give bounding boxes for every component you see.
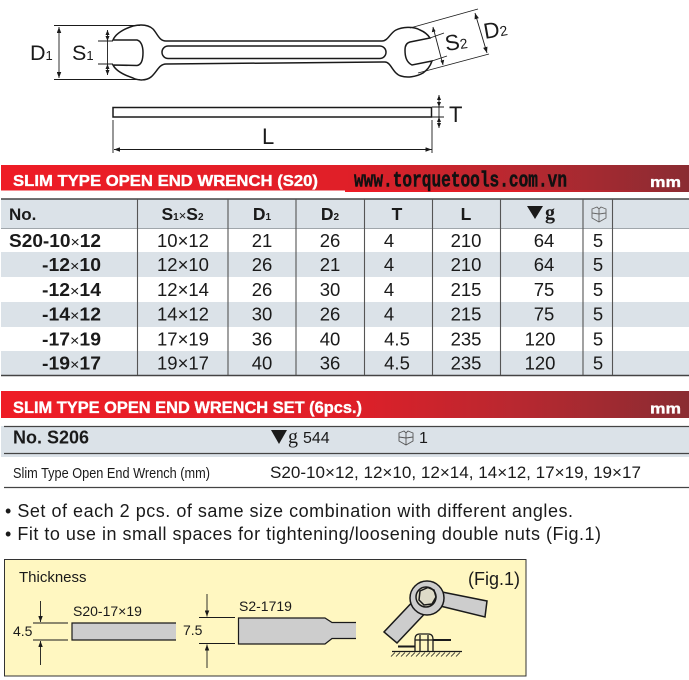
table row backgrounds — [1, 199, 689, 375]
dimension D2: D2 — [482, 15, 509, 44]
diagram: wrench side view with dimensions: L — [262, 124, 274, 149]
figure 1: wrench on double nuts — [384, 569, 520, 656]
table rows: S20-10×12 — [9, 231, 101, 251]
table rows: 5 — [593, 328, 603, 350]
table rows: 210 — [451, 254, 481, 275]
table rows: -19×17 — [42, 354, 101, 374]
table rows: -17×19 — [42, 330, 101, 350]
dimension D1 — [30, 26, 140, 80]
table rows: 4 — [384, 304, 394, 324]
table header: No. — [9, 205, 36, 224]
notes: • Fit to use in small spaces for tightening/loosening double nuts (Fig.1) — [5, 524, 601, 544]
notes — [5, 501, 601, 544]
diagram: wrench side view with dimensions — [113, 95, 462, 153]
table: wrench set: No. S206 — [13, 428, 89, 448]
table rows: 12×14 — [157, 279, 209, 300]
table rows: 30 — [320, 279, 340, 300]
figure 1: wrench on double nuts: (Fig.1) — [468, 569, 520, 589]
thickness: S20-17x19 — [13, 601, 176, 665]
table rows: 5 — [593, 230, 603, 251]
dimension D2 — [410, 9, 509, 73]
table rows: 10×12 — [157, 230, 209, 251]
table rows: 5 — [593, 279, 603, 300]
table rows: 64 — [534, 230, 554, 251]
table rows: -14×12 — [42, 304, 101, 324]
thickness: S20-17x19: S20-17×19 — [73, 603, 142, 619]
table: wrench set: Slim Type Open End Wrench (mm) — [13, 465, 210, 482]
diagram: wrench side view with dimensions: T — [449, 102, 462, 127]
thickness: S20-17x19: 4.5 — [13, 623, 33, 639]
table rows: 120 — [525, 328, 555, 350]
table rows: 26 — [252, 279, 272, 300]
table rows: 19×17 — [157, 352, 209, 374]
thickness: S2-1719: S2-1719 — [239, 598, 292, 614]
table: wrench sizes — [1, 199, 689, 376]
heading band: wrench set — [1, 391, 689, 418]
table rows: 5 — [593, 352, 603, 374]
table rows: 75 — [534, 279, 554, 300]
table rows: 26 — [320, 230, 340, 251]
heading band: wrench table: mm — [650, 174, 681, 191]
table rows: 12×10 — [157, 254, 209, 275]
table header — [9, 202, 606, 224]
table rows: 4 — [384, 254, 394, 275]
table rows: 17×19 — [157, 328, 209, 350]
table rows: 4 — [384, 279, 394, 300]
table rows: 210 — [451, 230, 481, 251]
weight value — [271, 426, 330, 448]
table rows: 14×12 — [157, 304, 209, 324]
table rows: 26 — [320, 304, 340, 324]
table rows: 36 — [320, 352, 340, 374]
heading band: wrench table: SLIM TYPE OPEN END WRENCH (S20) — [13, 173, 318, 190]
heading band: wrench table — [1, 165, 689, 194]
table rows: 26 — [252, 254, 272, 275]
table rows: 120 — [525, 352, 555, 374]
table header: S1×S2 — [161, 204, 204, 224]
table rows: 36 — [252, 328, 272, 350]
table rows: 4.5 — [384, 328, 410, 350]
dimension S2 — [430, 27, 469, 65]
notes: • Set of each 2 pcs. of same size combination with different angles. — [5, 501, 573, 521]
weight value: 544 — [303, 430, 330, 447]
heading band: wrench table: www.torquetools.com.vn — [354, 168, 567, 194]
table rows: 4.5 — [384, 352, 410, 374]
table rows: 30 — [252, 304, 272, 324]
table rows — [9, 230, 603, 374]
thickness: S2-1719 — [183, 594, 356, 668]
table rows: 5 — [593, 304, 603, 324]
table rows: 215 — [451, 304, 481, 324]
table rows: 21 — [320, 254, 340, 275]
diagram: wrench top view with dimensions — [30, 9, 509, 80]
table rows: 215 — [451, 279, 481, 300]
table rows: 21 — [252, 230, 272, 251]
wrench outline — [113, 25, 432, 80]
icon: box — [592, 207, 606, 222]
set quantity — [399, 430, 428, 447]
table: wrench set — [1, 426, 689, 488]
table header: D2 — [321, 204, 340, 224]
table rows: 40 — [252, 352, 272, 374]
table rows: 40 — [320, 328, 340, 350]
table rows: -12×14 — [42, 280, 101, 300]
dimension S1 — [72, 30, 113, 75]
table header: D1 — [253, 204, 272, 224]
table header: g — [545, 202, 555, 224]
dimension D1: D1 — [30, 41, 53, 65]
table rows: -12×10 — [42, 255, 101, 275]
table header: T — [392, 204, 403, 224]
heading band: wrench set: mm — [650, 400, 681, 418]
table: wrench set: S20-10×12, 12×10, 12×14, 14×12, 17×19, 19×17 — [270, 464, 641, 482]
table rows: 235 — [451, 328, 481, 350]
table rows: 64 — [534, 254, 554, 275]
dimension S1: S1 — [72, 41, 94, 65]
table header: L — [461, 204, 472, 224]
table rows: 235 — [451, 352, 481, 374]
panel: thickness — [4, 560, 526, 676]
panel: thickness: Thickness — [19, 569, 87, 586]
table rows: 75 — [534, 304, 554, 324]
dimension S2: S2 — [443, 28, 469, 56]
weight value: g — [288, 426, 298, 448]
thickness: S2-1719: 7.5 — [183, 622, 203, 638]
heading band: wrench set: SLIM TYPE OPEN END WRENCH SET (6pcs.) — [13, 399, 362, 417]
table rows: 4 — [384, 230, 394, 251]
set quantity: 1 — [419, 430, 428, 447]
table rows: 5 — [593, 254, 603, 275]
